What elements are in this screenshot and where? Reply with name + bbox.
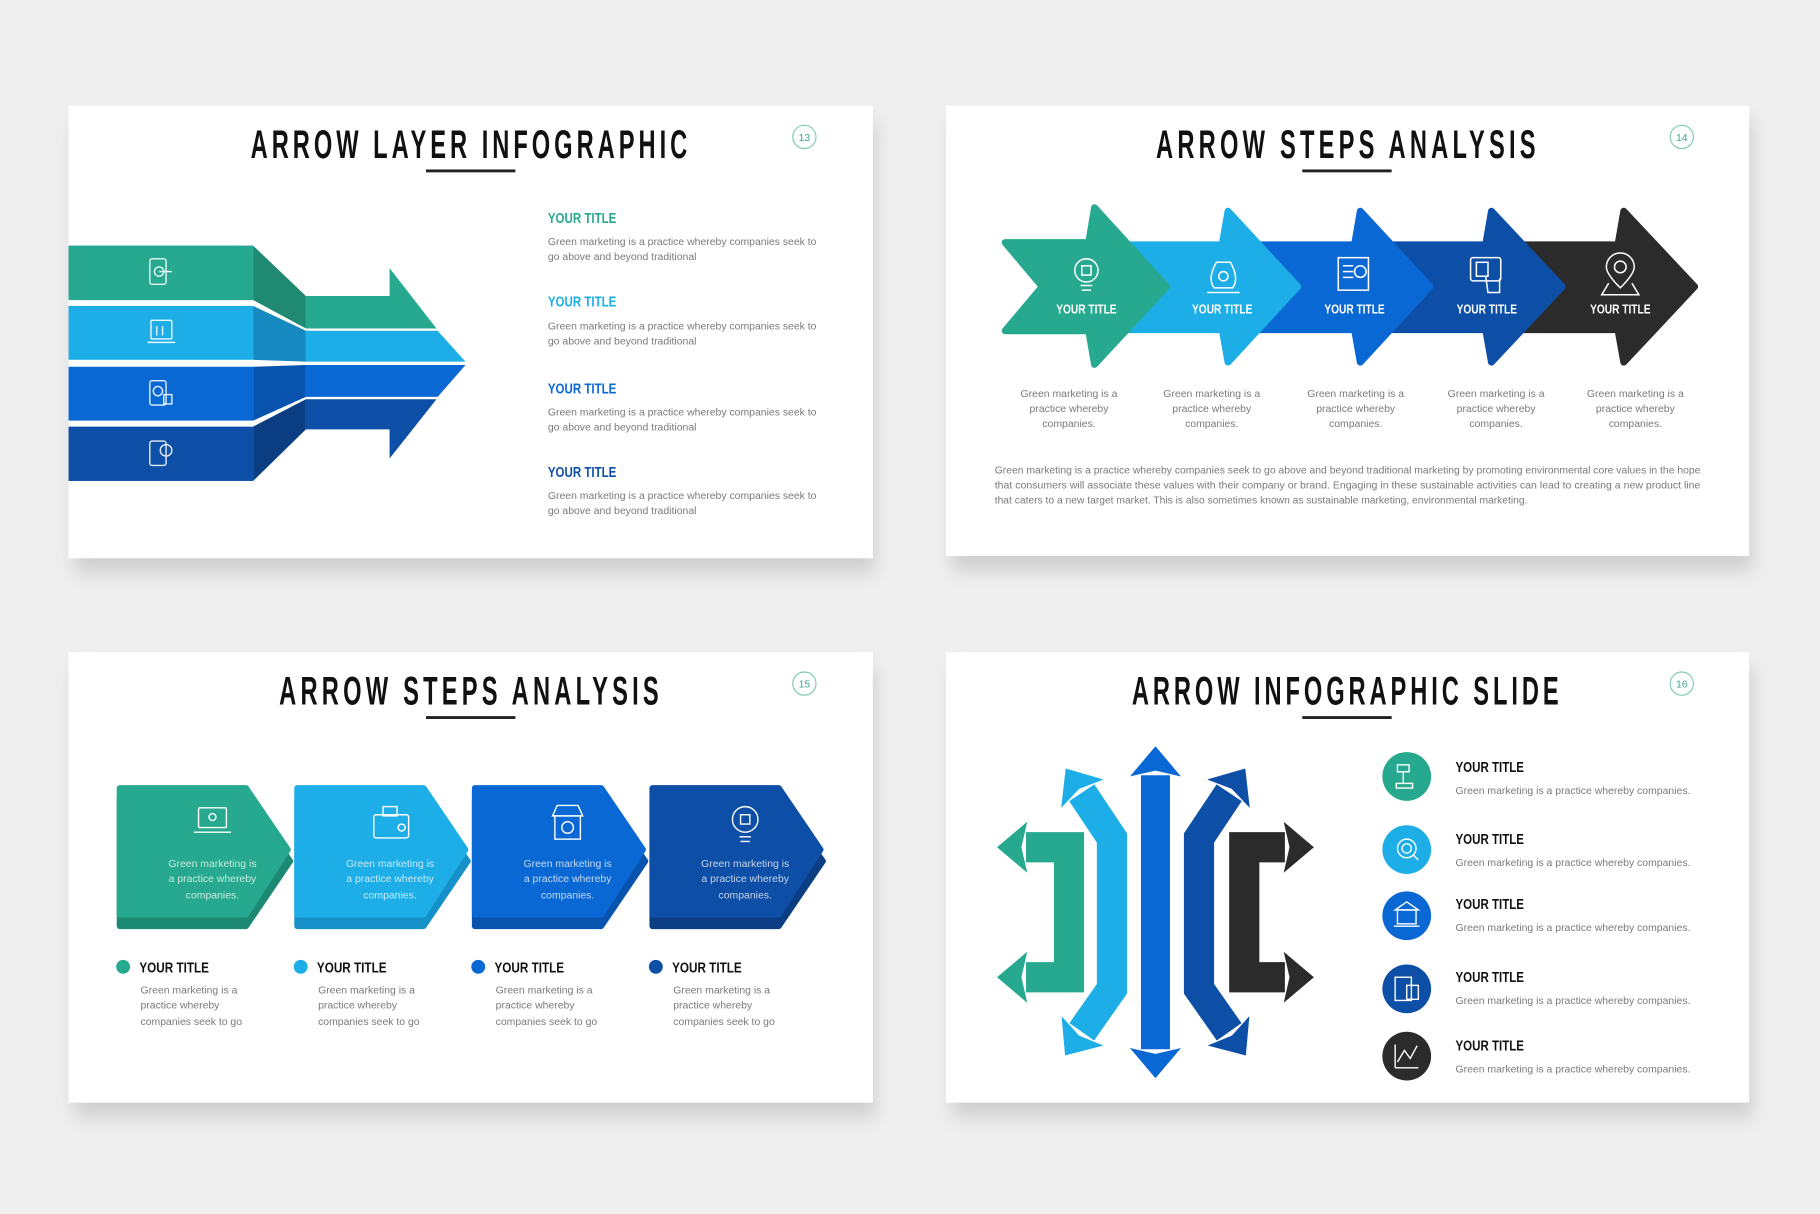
step descriptions: practice whereby	[1596, 404, 1676, 415]
list items: YOUR TITLE	[1455, 969, 1524, 986]
legend items: practice whereby	[141, 1001, 220, 1012]
text items: YOUR TITLE	[548, 293, 616, 310]
page number	[793, 125, 816, 149]
list items: YOUR TITLE	[1455, 759, 1524, 776]
legend items: companies seek to go	[141, 1017, 242, 1028]
text items: Green marketing is a practice whereby companies seek to	[548, 237, 817, 248]
text items: go above and beyond traditional	[548, 423, 696, 434]
text items: go above and beyond traditional	[548, 506, 696, 517]
text items: go above and beyond traditional	[548, 337, 696, 348]
step labels: YOUR TITLE	[1192, 301, 1252, 316]
step descriptions: Green marketing is a	[1021, 389, 1118, 400]
step labels: YOUR TITLE	[1457, 301, 1517, 316]
text items: go above and beyond traditional	[548, 252, 696, 263]
panel: arrow steps analysis 15	[69, 652, 873, 1103]
step labels: YOUR TITLE	[1056, 301, 1117, 316]
paragraph: that consumers will associate these values with their company or brand. Engaging in these sustainable activities can lead to creating a new product line	[995, 481, 1701, 492]
list items: YOUR TITLE	[1455, 1037, 1524, 1054]
legend items: Green marketing is a	[496, 985, 593, 996]
chevron text: Green marketing is	[701, 859, 789, 870]
chevron text	[168, 859, 790, 901]
chevron text: Green marketing is	[524, 859, 612, 870]
page number: 15	[799, 680, 810, 691]
page number: 13	[799, 133, 810, 144]
step descriptions: companies.	[1185, 419, 1238, 430]
panel: arrow layer infographic	[69, 106, 873, 558]
chevrons	[120, 788, 823, 926]
text items: YOUR TITLE	[548, 464, 616, 481]
legend items: companies seek to go	[673, 1017, 775, 1028]
step labels: YOUR TITLE	[1590, 301, 1650, 316]
legend items: practice whereby	[673, 1001, 753, 1012]
text items: Green marketing is a practice whereby companies seek to	[548, 491, 817, 502]
chevron text: companies.	[541, 890, 594, 901]
list items: Green marketing is a practice whereby companies.	[1455, 786, 1690, 797]
step descriptions: companies.	[1042, 419, 1096, 430]
list items	[1382, 752, 1690, 1081]
step descriptions: practice whereby	[1030, 404, 1109, 415]
step descriptions: companies.	[1329, 419, 1382, 430]
legend items: Green marketing is a	[141, 985, 238, 996]
paragraph: that caters to a new target market. This is also sometimes known as sustainable marketing, environmental marketing.	[995, 496, 1527, 507]
list items: Green marketing is a practice whereby companies.	[1455, 858, 1690, 869]
page number: 14	[1676, 133, 1688, 144]
chevron text: a practice whereby	[346, 874, 435, 885]
legend items: YOUR TITLE	[495, 960, 564, 977]
page number	[1670, 125, 1693, 149]
chevron text: a practice whereby	[524, 874, 612, 885]
list items: Green marketing is a practice whereby companies.	[1455, 923, 1690, 934]
chevron text: Green marketing is	[168, 859, 257, 870]
text items: Green marketing is a practice whereby companies seek to	[548, 407, 817, 418]
page number	[1670, 672, 1693, 695]
legend items: YOUR TITLE	[139, 960, 209, 977]
step icons	[1075, 253, 1639, 295]
list items: Green marketing is a practice whereby companies.	[1455, 1064, 1690, 1075]
chevron text: a practice whereby	[701, 874, 790, 885]
page number	[793, 672, 816, 695]
title: ARROW LAYER INFOGRAPHIC	[251, 123, 687, 166]
step descriptions: Green marketing is a	[1587, 389, 1684, 400]
radiating arrows diagram	[1026, 775, 1285, 1049]
legend items: practice whereby	[496, 1001, 575, 1012]
chevron text: companies.	[719, 890, 772, 901]
legend items: YOUR TITLE	[672, 960, 742, 977]
legend items: companies seek to go	[318, 1017, 420, 1028]
layered arrow chart	[69, 246, 465, 481]
chevron text: Green marketing is	[346, 859, 434, 870]
legend items	[116, 960, 775, 1028]
title: ARROW STEPS ANALYSIS	[279, 669, 659, 713]
step descriptions: Green marketing is a	[1163, 389, 1260, 400]
list items: YOUR TITLE	[1455, 896, 1524, 913]
title: ARROW STEPS ANALYSIS	[1156, 123, 1536, 166]
text items: YOUR TITLE	[548, 210, 616, 227]
chevron icons	[194, 805, 758, 841]
text items	[548, 210, 817, 517]
step descriptions: practice whereby	[1172, 404, 1252, 415]
list items: Green marketing is a practice whereby companies.	[1455, 996, 1690, 1007]
panel: arrow steps analysis 14	[946, 106, 1749, 556]
legend items: practice whereby	[318, 1001, 398, 1012]
step descriptions: Green marketing is a	[1307, 389, 1404, 400]
list items: YOUR TITLE	[1455, 831, 1524, 848]
legend items: Green marketing is a	[318, 985, 415, 996]
icons	[147, 259, 175, 465]
step descriptions: companies.	[1609, 419, 1662, 430]
chevron text: a practice whereby	[169, 874, 257, 885]
legend items: companies seek to go	[496, 1017, 597, 1028]
step labels: YOUR TITLE	[1324, 301, 1385, 316]
legend items: Green marketing is a	[673, 985, 770, 996]
step labels	[1056, 301, 1650, 316]
step descriptions: practice whereby	[1457, 404, 1536, 415]
title: ARROW INFOGRAPHIC SLIDE	[1132, 669, 1559, 713]
panel shadows	[74, 121, 1753, 1118]
legend items: YOUR TITLE	[317, 960, 387, 977]
step descriptions: companies.	[1469, 419, 1523, 430]
page number: 16	[1676, 680, 1688, 691]
paragraph: Green marketing is a practice whereby companies seek to go above and beyond traditional marketing by promoting environmental core values in the hope	[995, 466, 1701, 477]
chevron text: companies.	[363, 890, 417, 901]
text items: YOUR TITLE	[548, 380, 616, 397]
panel: arrow infographic slide	[946, 652, 1749, 1103]
paragraph	[995, 466, 1701, 507]
step arrows	[1005, 208, 1695, 364]
chevron text: companies.	[186, 890, 239, 901]
step descriptions: Green marketing is a	[1448, 389, 1545, 400]
text items: Green marketing is a practice whereby companies seek to	[548, 322, 817, 333]
step descriptions: practice whereby	[1316, 404, 1396, 415]
step descriptions	[1021, 389, 1684, 430]
